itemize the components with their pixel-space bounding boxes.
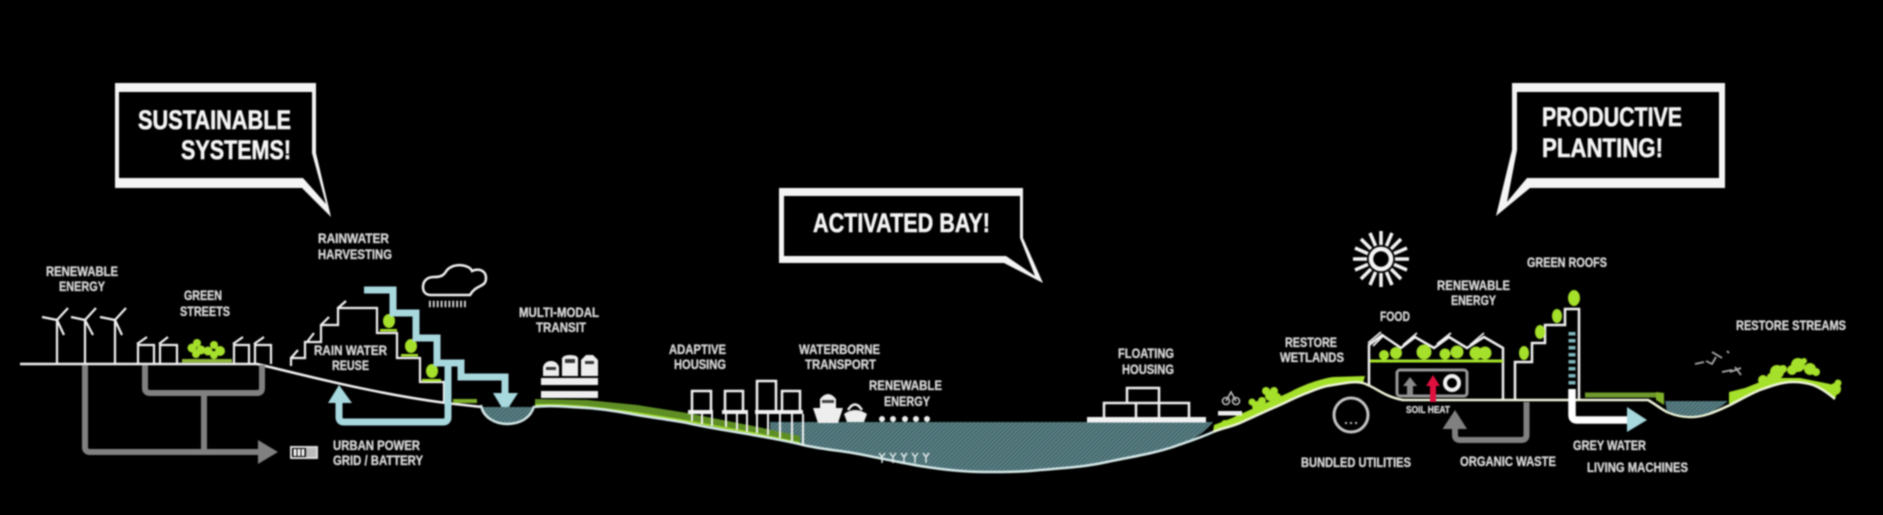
labels: right section: GREEN ROOFS: [1527, 255, 1607, 270]
icon: rain cloud: [423, 265, 486, 304]
callout: sustainable systems: SYSTEMS!: [181, 135, 291, 165]
labels: middle section: HOUSING: [1122, 362, 1174, 377]
grey water pipe and arrow: [1572, 389, 1647, 432]
labels: right section: FOOD: [1380, 309, 1410, 324]
labels: right section: RENEWABLE: [1437, 278, 1510, 293]
icon: battery: [291, 447, 317, 458]
roof plants: [1519, 290, 1580, 360]
wetland slope grass: [1213, 376, 1365, 432]
labels: middle section: WATERBORNE: [799, 342, 880, 357]
stream grass and pond: [1585, 392, 1728, 416]
pond side grass: [453, 399, 477, 403]
labels: middle section: RENEWABLE: [869, 378, 942, 393]
labels: right section: ENERGY: [1451, 293, 1496, 308]
soil heat panel: [1397, 370, 1467, 402]
icon: bundled utilities tube: [1334, 398, 1368, 432]
retention pond: [481, 405, 534, 424]
labels: left section: STREETS: [180, 304, 230, 319]
labels: middle section: TRANSPORT: [805, 357, 877, 372]
labels: middle section: ENERGY: [884, 394, 930, 409]
icon: ferry and boat: [813, 394, 867, 423]
labels: right section: SOIL HEAT: [1406, 405, 1450, 416]
icon: sun: [1353, 231, 1409, 287]
callout: sustainable systems: SUSTAINABLE: [138, 105, 291, 135]
greenhouse: [1368, 332, 1503, 400]
labels: right section: WETLANDS: [1280, 350, 1344, 365]
terraced building: [291, 301, 444, 403]
labels: right section: GREY WATER: [1573, 438, 1646, 453]
labels: left section: HARVESTING: [318, 247, 392, 262]
labels: right section: LIVING MACHINES: [1587, 460, 1688, 475]
grey power pipes: [85, 365, 278, 464]
rainwater pipes and arrows: [328, 290, 518, 422]
labels: left section: ENERGY: [59, 279, 105, 294]
labels: middle section: ADAPTIVE: [669, 342, 726, 357]
callout: productive planting: [1496, 83, 1725, 216]
labels: middle section: [519, 305, 1174, 409]
icon: transit vehicles and decks: [541, 355, 598, 398]
labels: right section: RESTORE STREAMS: [1736, 318, 1846, 333]
stream bank grass and trees: [1729, 358, 1842, 404]
labels: left section: RAINWATER: [318, 231, 389, 246]
icon: underwater turbines: [879, 453, 929, 463]
labels: middle section: HOUSING: [674, 357, 726, 372]
labels: right section: RESTORE: [1285, 335, 1337, 350]
ground profile line: [20, 364, 1835, 472]
labels: middle section: TRANSIT: [536, 320, 587, 335]
organic waste pipe and arrow: [1442, 402, 1526, 440]
shoreline grass band: [535, 399, 800, 444]
labels: left section: RAIN WATER: [314, 343, 387, 358]
labels: middle section: FLOATING: [1118, 346, 1174, 361]
labels: right section: ORGANIC WASTE: [1460, 454, 1556, 469]
labels: left section: RENEWABLE: [46, 264, 118, 279]
adaptive housing: [688, 381, 803, 445]
labels: left section: GREEN: [184, 288, 222, 303]
labels: right section: [1280, 255, 1846, 475]
icon: street houses: [137, 337, 271, 364]
bay water: [770, 422, 1213, 472]
stair plants: [380, 314, 441, 382]
callout: productive planting: PLANTING!: [1542, 133, 1663, 163]
labels: left section: GRID / BATTERY: [333, 453, 423, 468]
icon: street trees: [182, 339, 232, 362]
labels: left section: URBAN POWER: [333, 438, 420, 453]
green roof building: [1515, 309, 1579, 400]
icon: wind turbines: [42, 308, 126, 364]
labels: right section: BUNDLED UTILITIES: [1301, 455, 1411, 470]
icon: wave energy buoys: [879, 416, 930, 422]
icon: birds: [1695, 351, 1741, 375]
floating housing: [1087, 388, 1206, 422]
labels: left section: [46, 231, 423, 468]
icon: bicycle on platform: [1218, 392, 1242, 416]
labels: middle section: MULTI-MODAL: [519, 305, 599, 320]
labels: left section: REUSE: [332, 358, 369, 373]
callout: productive planting: PRODUCTIVE: [1542, 102, 1682, 132]
callout: sustainable systems: [115, 83, 331, 217]
callout: activated bay: ACTIVATED BAY!: [813, 208, 990, 238]
callout: activated bay: [779, 188, 1043, 283]
